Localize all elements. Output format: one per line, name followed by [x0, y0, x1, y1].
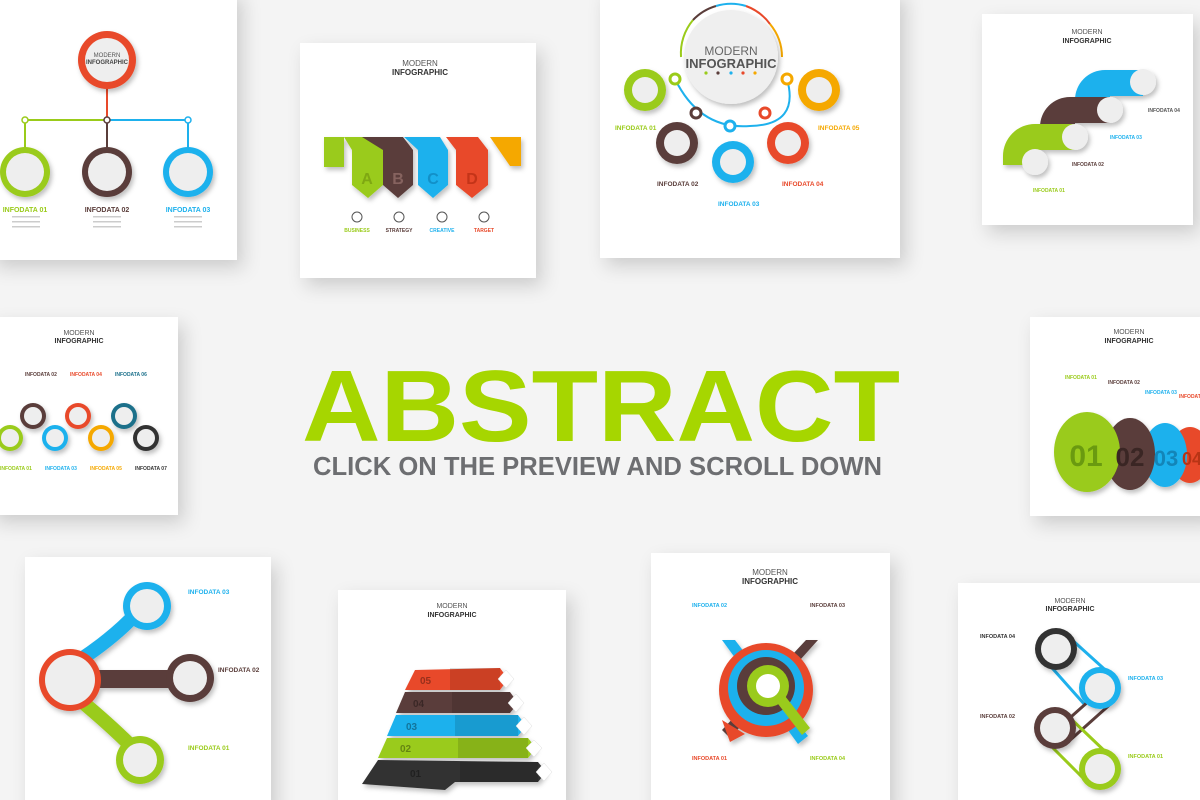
card 7: branch circles [25, 557, 271, 800]
card 5: wave chain: INFODATA 03 [45, 466, 77, 472]
node: modern infographic: INFOGRAPHIC [86, 60, 129, 66]
card 8: pyramid: INFOGRAPHIC [428, 612, 476, 619]
card 5: wave chain: INFODATA 04 [70, 372, 102, 378]
card 6: discs: INFODATA 03 [1145, 390, 1177, 396]
card 9: target: INFODATA 02 [692, 603, 727, 609]
card 3: arc infographic [600, 0, 900, 258]
card 7: branch circles: INFODATA 03 [188, 589, 230, 596]
card 10: chain: INFODATA 04 [980, 634, 1016, 640]
card 8: pyramid: 03 [406, 722, 418, 733]
card 5: wave chain: MODERN [63, 330, 95, 337]
card 2: ribbons ABCD: C [427, 171, 439, 188]
card 6: discs [1030, 317, 1200, 516]
card 5: wave chain [0, 317, 178, 515]
card 2: ribbons ABCD: BUSINESS [344, 228, 370, 234]
card 4: steps: INFODATA 04 [1148, 108, 1180, 114]
card 8: pyramid: MODERN [436, 603, 468, 610]
card 8: pyramid [338, 590, 566, 800]
labels: INFODATA 02 [85, 207, 129, 214]
card 9: target: INFODATA 04 [810, 756, 846, 762]
card 9: target: INFODATA 01 [692, 756, 727, 762]
node: modern infographic: MODERN [94, 53, 120, 59]
card 2: ribbons ABCD: INFOGRAPHIC [392, 68, 448, 77]
card 6: discs: 03 [1154, 446, 1178, 471]
subtitle: CLICK ON THE PREVIEW AND SCROLL DOWN [313, 451, 882, 481]
card 9: target: INFODATA 03 [810, 603, 845, 609]
nodes [0, 147, 213, 197]
labels: INFODATA 01 [3, 207, 47, 214]
card 3: arc infographic: INFODATA 01 [615, 125, 657, 132]
card 10: chain: INFOGRAPHIC [1046, 606, 1094, 613]
card 8: pyramid: 04 [413, 699, 425, 710]
card 8: pyramid: 05 [420, 676, 432, 687]
title: ABSTRACT: ABSTRACT [302, 351, 900, 463]
card 6: discs: 02 [1116, 442, 1144, 472]
card 2: ribbons ABCD: D [466, 171, 478, 188]
card 6: discs: INFOGRAPHIC [1104, 338, 1154, 345]
card 10: chain: INFODATA 01 [1128, 754, 1163, 760]
card 1: org chart [0, 0, 237, 260]
card 4: steps [982, 14, 1193, 225]
card 2: ribbons ABCD: MODERN [402, 59, 438, 68]
card 5: wave chain: INFODATA 06 [115, 372, 147, 378]
card 2: ribbons ABCD: CREATIVE [430, 228, 455, 234]
card 2: ribbons ABCD: B [392, 171, 404, 188]
card 2: ribbons ABCD [300, 43, 536, 278]
labels: INFODATA 03 [166, 207, 210, 214]
card 4: steps: INFOGRAPHIC [1062, 38, 1112, 45]
card 5: wave chain: INFOGRAPHIC [54, 338, 104, 345]
card 9: target: INFOGRAPHIC [742, 577, 798, 586]
card 3: arc infographic: INFODATA 03 [718, 201, 760, 208]
card 6: discs: INFODATA 02 [1108, 380, 1140, 386]
card 4: steps: INFODATA 02 [1072, 162, 1104, 168]
card 4: steps: MODERN [1071, 29, 1103, 36]
card 5: wave chain: INFODATA 07 [135, 466, 167, 472]
card 10: chain: MODERN [1054, 598, 1086, 605]
card 5: wave chain: INFODATA 02 [25, 372, 57, 378]
bubbles [624, 69, 840, 183]
card 3: arc infographic: INFODATA 05 [818, 125, 860, 132]
central circle: INFOGRAPHIC [686, 56, 777, 71]
labels [3, 207, 210, 214]
card 10: chain [958, 583, 1200, 800]
card 8: pyramid: 02 [400, 744, 412, 755]
card 3: arc infographic: INFODATA 04 [782, 181, 824, 188]
card 4: steps: INFODATA 01 [1033, 188, 1065, 194]
node: modern infographic [78, 31, 136, 89]
card 8: pyramid: 01 [410, 769, 422, 780]
card 10: chain: INFODATA 03 [1128, 676, 1163, 682]
card 10: chain: INFODATA 02 [980, 714, 1015, 720]
card 6: discs: 01 [1069, 440, 1103, 473]
card 7: branch circles: INFODATA 01 [188, 745, 230, 752]
card 9: target [651, 553, 890, 800]
card 6: discs: MODERN [1113, 329, 1145, 336]
card 2: ribbons ABCD: STRATEGY [386, 228, 413, 234]
card 2: ribbons ABCD: A [361, 171, 373, 188]
central circle: MODERN [704, 44, 758, 58]
card 5: wave chain: INFODATA 01 [0, 466, 32, 472]
card 4: steps: INFODATA 03 [1110, 135, 1142, 141]
card 9: target: MODERN [752, 568, 788, 577]
card 2: ribbons ABCD: TARGET [474, 228, 494, 234]
card 3: arc infographic: INFODATA 02 [657, 181, 699, 188]
card 7: branch circles: INFODATA 02 [218, 667, 260, 674]
central circle [684, 10, 778, 104]
card 5: wave chain: INFODATA 05 [90, 466, 122, 472]
card 6: discs: INFODATA 01 [1065, 375, 1097, 381]
